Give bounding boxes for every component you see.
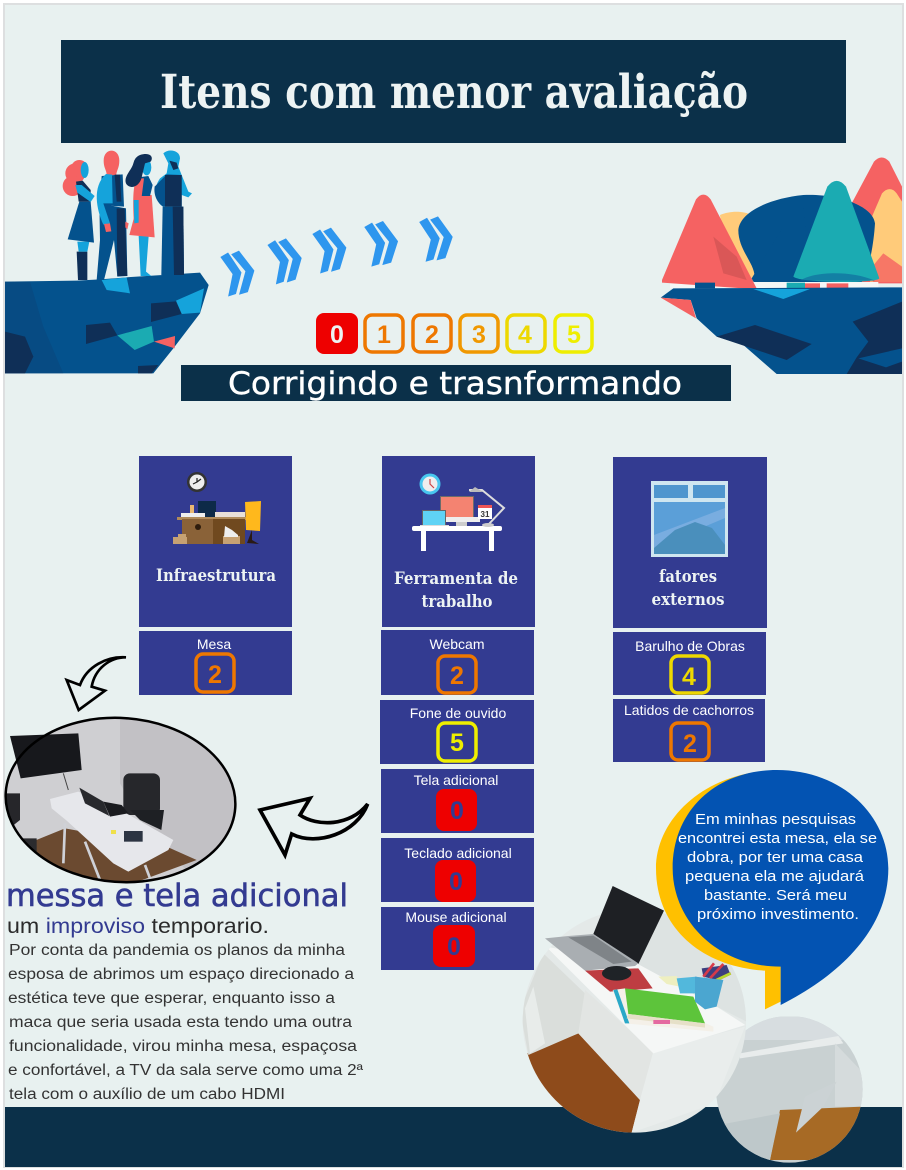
item: Tela adicional: [381, 769, 534, 833]
heading: fatores externos: fatores: [659, 567, 717, 587]
item: Latidos de cachorros: [613, 699, 765, 762]
item: Mouse adicional: Mouse adicional: [405, 909, 507, 925]
illustration: chevron arrows: [220, 216, 454, 297]
item: Mouse adicional: 0: [447, 933, 461, 961]
rating scale legend: 0: [330, 321, 344, 349]
rating scale legend: [316, 313, 592, 354]
item: Fone de ouvido: Fone de ouvido: [410, 705, 506, 721]
panel: Ferramenta de trabalho: [382, 456, 535, 627]
item: Mesa: 2: [208, 661, 222, 689]
item: Mesa: Mesa: [197, 636, 231, 652]
text block: story: tela com o auxílio de um cabo HDMI: [9, 1086, 285, 1103]
text block: story: Por conta da pandemia os planos da minha: [9, 942, 345, 959]
item: Barulho de Obras: Barulho de Obras: [635, 638, 745, 654]
text block: story: e confortável, a TV da sala serve como uma 2ª: [8, 1062, 363, 1079]
heading: Infraestrutura: Infraestrutura: [156, 566, 276, 586]
rating scale legend: 1: [377, 321, 391, 349]
subheading: um improviso temporario.: [7, 915, 269, 938]
panel: fatores externos: externos: [652, 590, 724, 610]
illustration: floating island with trees: [661, 157, 902, 374]
photo: folding desk open: [517, 886, 750, 1137]
text block: story: estética teve que esperar, enquanto isso a: [8, 990, 335, 1007]
speech bubble: pequena ela me ajudará: [685, 868, 865, 885]
text block: story: [8, 942, 363, 1103]
item: Fone de ouvido: 5: [450, 729, 464, 757]
heading: messa e tela adicional: messa e tela adicional: [6, 878, 348, 914]
icon: desk with clock: [173, 472, 261, 544]
item: Webcam: [381, 630, 534, 695]
item: Webcam: 2: [450, 662, 464, 690]
item: Latidos de cachorros: 2: [683, 730, 697, 758]
rating scale legend: 3: [472, 321, 486, 349]
item: Teclado adicional: [381, 838, 534, 902]
item: Teclado adicional: 0: [449, 868, 463, 896]
icon: window: [651, 481, 728, 557]
item: Fone de ouvido: [380, 700, 534, 764]
speech bubble: Em minhas pesquisas: [695, 811, 856, 828]
arrow: from items to photo: [260, 798, 368, 855]
icon: computer desk: 31: [481, 510, 490, 519]
text block: story: maca que seria usada esta tendo uma outra: [9, 1014, 352, 1031]
heading: Ferramenta de trabalho: Ferramenta de: [394, 569, 518, 589]
speech bubble: próximo investimento.: [697, 906, 859, 923]
rating scale legend: 2: [425, 321, 439, 349]
speech bubble: [656, 770, 888, 1009]
item: Barulho de Obras: 4: [682, 663, 696, 691]
speech bubble: dobra, por ter uma casa: [687, 849, 864, 866]
subtitle banner: Corrigindo e trasnformando: [228, 366, 682, 402]
panel: Infraestrutura: [139, 456, 292, 627]
panel: Ferramenta de trabalho: trabalho: [422, 592, 492, 612]
text block: story: esposa de abrimos um espaço direcionado a: [8, 966, 354, 983]
arrow: from Mesa to photo: [67, 657, 126, 710]
title: Itens com menor avaliação: [160, 65, 748, 120]
item: Mouse adicional: [381, 907, 534, 970]
item: Tela adicional: Tela adicional: [414, 772, 498, 788]
footer bar: [5, 1107, 902, 1167]
photo: improvised desk and TV: [4, 716, 237, 884]
speech bubble: bastante. Será meu: [704, 887, 847, 904]
item: Tela adicional: 0: [450, 797, 464, 825]
illustration: people on cliff: [5, 151, 209, 373]
title: [61, 40, 846, 143]
photo: folding desk closed: [710, 1017, 870, 1163]
item: Teclado adicional: Teclado adicional: [404, 845, 512, 861]
item: Webcam: Webcam: [430, 636, 484, 652]
rating scale legend: 5: [567, 321, 581, 349]
text block: story: funcionalidade, virou minha mesa, espaçosa: [9, 1038, 357, 1055]
panel: fatores externos: [613, 457, 767, 628]
item: Latidos de cachorros: Latidos de cachorros: [624, 702, 754, 718]
item: Barulho de Obras: [613, 632, 766, 695]
item: Mesa: [139, 631, 292, 695]
icon: computer desk: [412, 474, 504, 551]
speech bubble: encontrei esta mesa, ela se: [678, 830, 877, 847]
rating scale legend: 4: [518, 321, 532, 349]
